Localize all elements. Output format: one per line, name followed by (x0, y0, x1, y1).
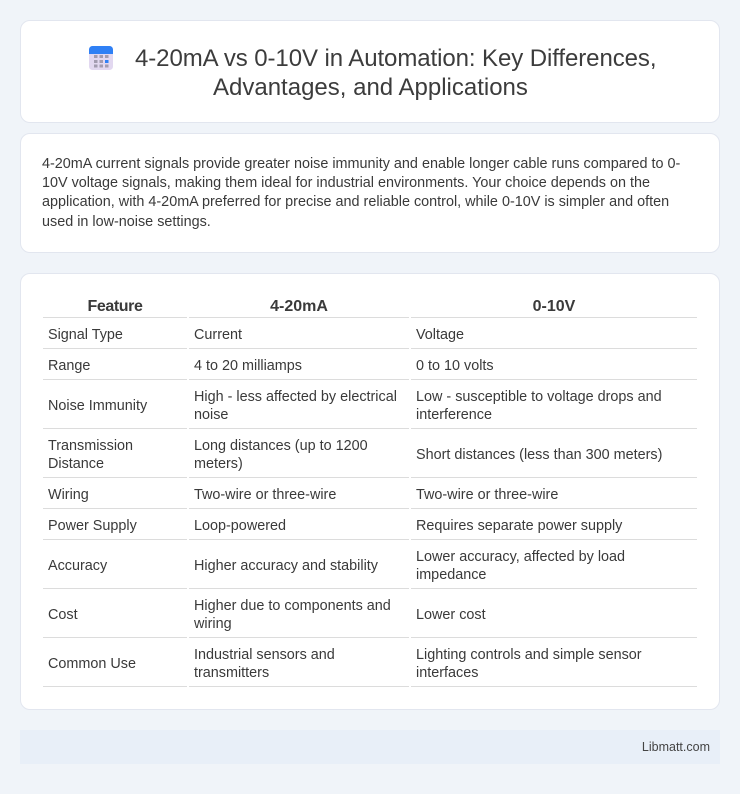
comparison table: Two-wire or three-wire (194, 487, 336, 503)
row: Transmission Distance (48, 438, 133, 472)
comparison table: High - less affected by electrical (194, 389, 397, 405)
comparison table: Lower accuracy, affected by load (416, 549, 625, 565)
panel: comparison table card (20, 273, 720, 710)
comparison table: Industrial sensors and (194, 647, 335, 663)
comparison table: interference (416, 407, 492, 423)
panel: title card (20, 20, 720, 123)
row: Common Use: Common Use (48, 656, 136, 672)
comparison table: Higher due to components and (194, 598, 391, 614)
title: 4-20mA vs 0-10V in Automation: Key Differences, (135, 45, 656, 72)
summary text: 10V voltage signals, making them ideal for industrial environments. Your choice depends on the (42, 175, 650, 191)
title (135, 45, 656, 101)
comparison table: Two-wire or three-wire (416, 487, 558, 503)
header: 0-10V: 0-10V (533, 298, 575, 315)
comparison table: wiring (194, 616, 232, 632)
comparison table: Current (194, 327, 242, 343)
row: Transmission Distance: Transmission (48, 438, 133, 454)
comparison table: impedance (416, 567, 486, 583)
comparison table: 4 to 20 milliamps (194, 358, 302, 374)
row: Noise Immunity: Noise Immunity (48, 398, 147, 414)
row: Signal Type: Signal Type (48, 327, 123, 343)
panel: summary card (20, 133, 720, 253)
comparison table: interfaces (416, 665, 478, 681)
header: Feature: Feature (88, 298, 142, 315)
header: 4-20mA: 4-20mA (270, 298, 328, 315)
comparison table: Voltage (416, 327, 464, 343)
comparison table: Long distances (up to 1200 (194, 438, 368, 454)
row: Accuracy: Accuracy (48, 558, 107, 574)
footer text: Libmatt.com (642, 740, 710, 754)
comparison table: 0 to 10 volts (416, 358, 494, 374)
row: Cost: Cost (48, 607, 78, 623)
row: Range: Range (48, 358, 90, 374)
comparison table: Higher accuracy and stability (194, 558, 378, 574)
row: Power Supply: Power Supply (48, 518, 137, 534)
row: Wiring: Wiring (48, 487, 89, 503)
comparison table: meters) (194, 456, 243, 472)
comparison table: noise (194, 407, 228, 423)
comparison table: Requires separate power supply (416, 518, 622, 534)
summary text: application, with 4-20mA preferred for precise and reliable control, while 0-10V is simpler and often (42, 194, 669, 210)
summary text: used in low-noise settings. (42, 214, 211, 230)
comparison table: Lighting controls and simple sensor (416, 647, 642, 663)
footer bar (20, 730, 720, 764)
row: Transmission Distance: Distance (48, 456, 104, 472)
comparison table: Low - susceptible to voltage drops and (416, 389, 662, 405)
summary text (42, 156, 680, 230)
comparison table (43, 298, 697, 687)
comparison table: Lower cost (416, 607, 486, 623)
comparison table: Loop-powered (194, 518, 286, 534)
comparison table: Short distances (less than 300 meters) (416, 447, 662, 463)
title: Advantages, and Applications (213, 74, 528, 101)
comparison table: transmitters (194, 665, 269, 681)
summary text: 4-20mA current signals provide greater noise immunity and enable longer cable runs compared to 0- (42, 156, 680, 172)
icon: calendar (89, 46, 113, 70)
